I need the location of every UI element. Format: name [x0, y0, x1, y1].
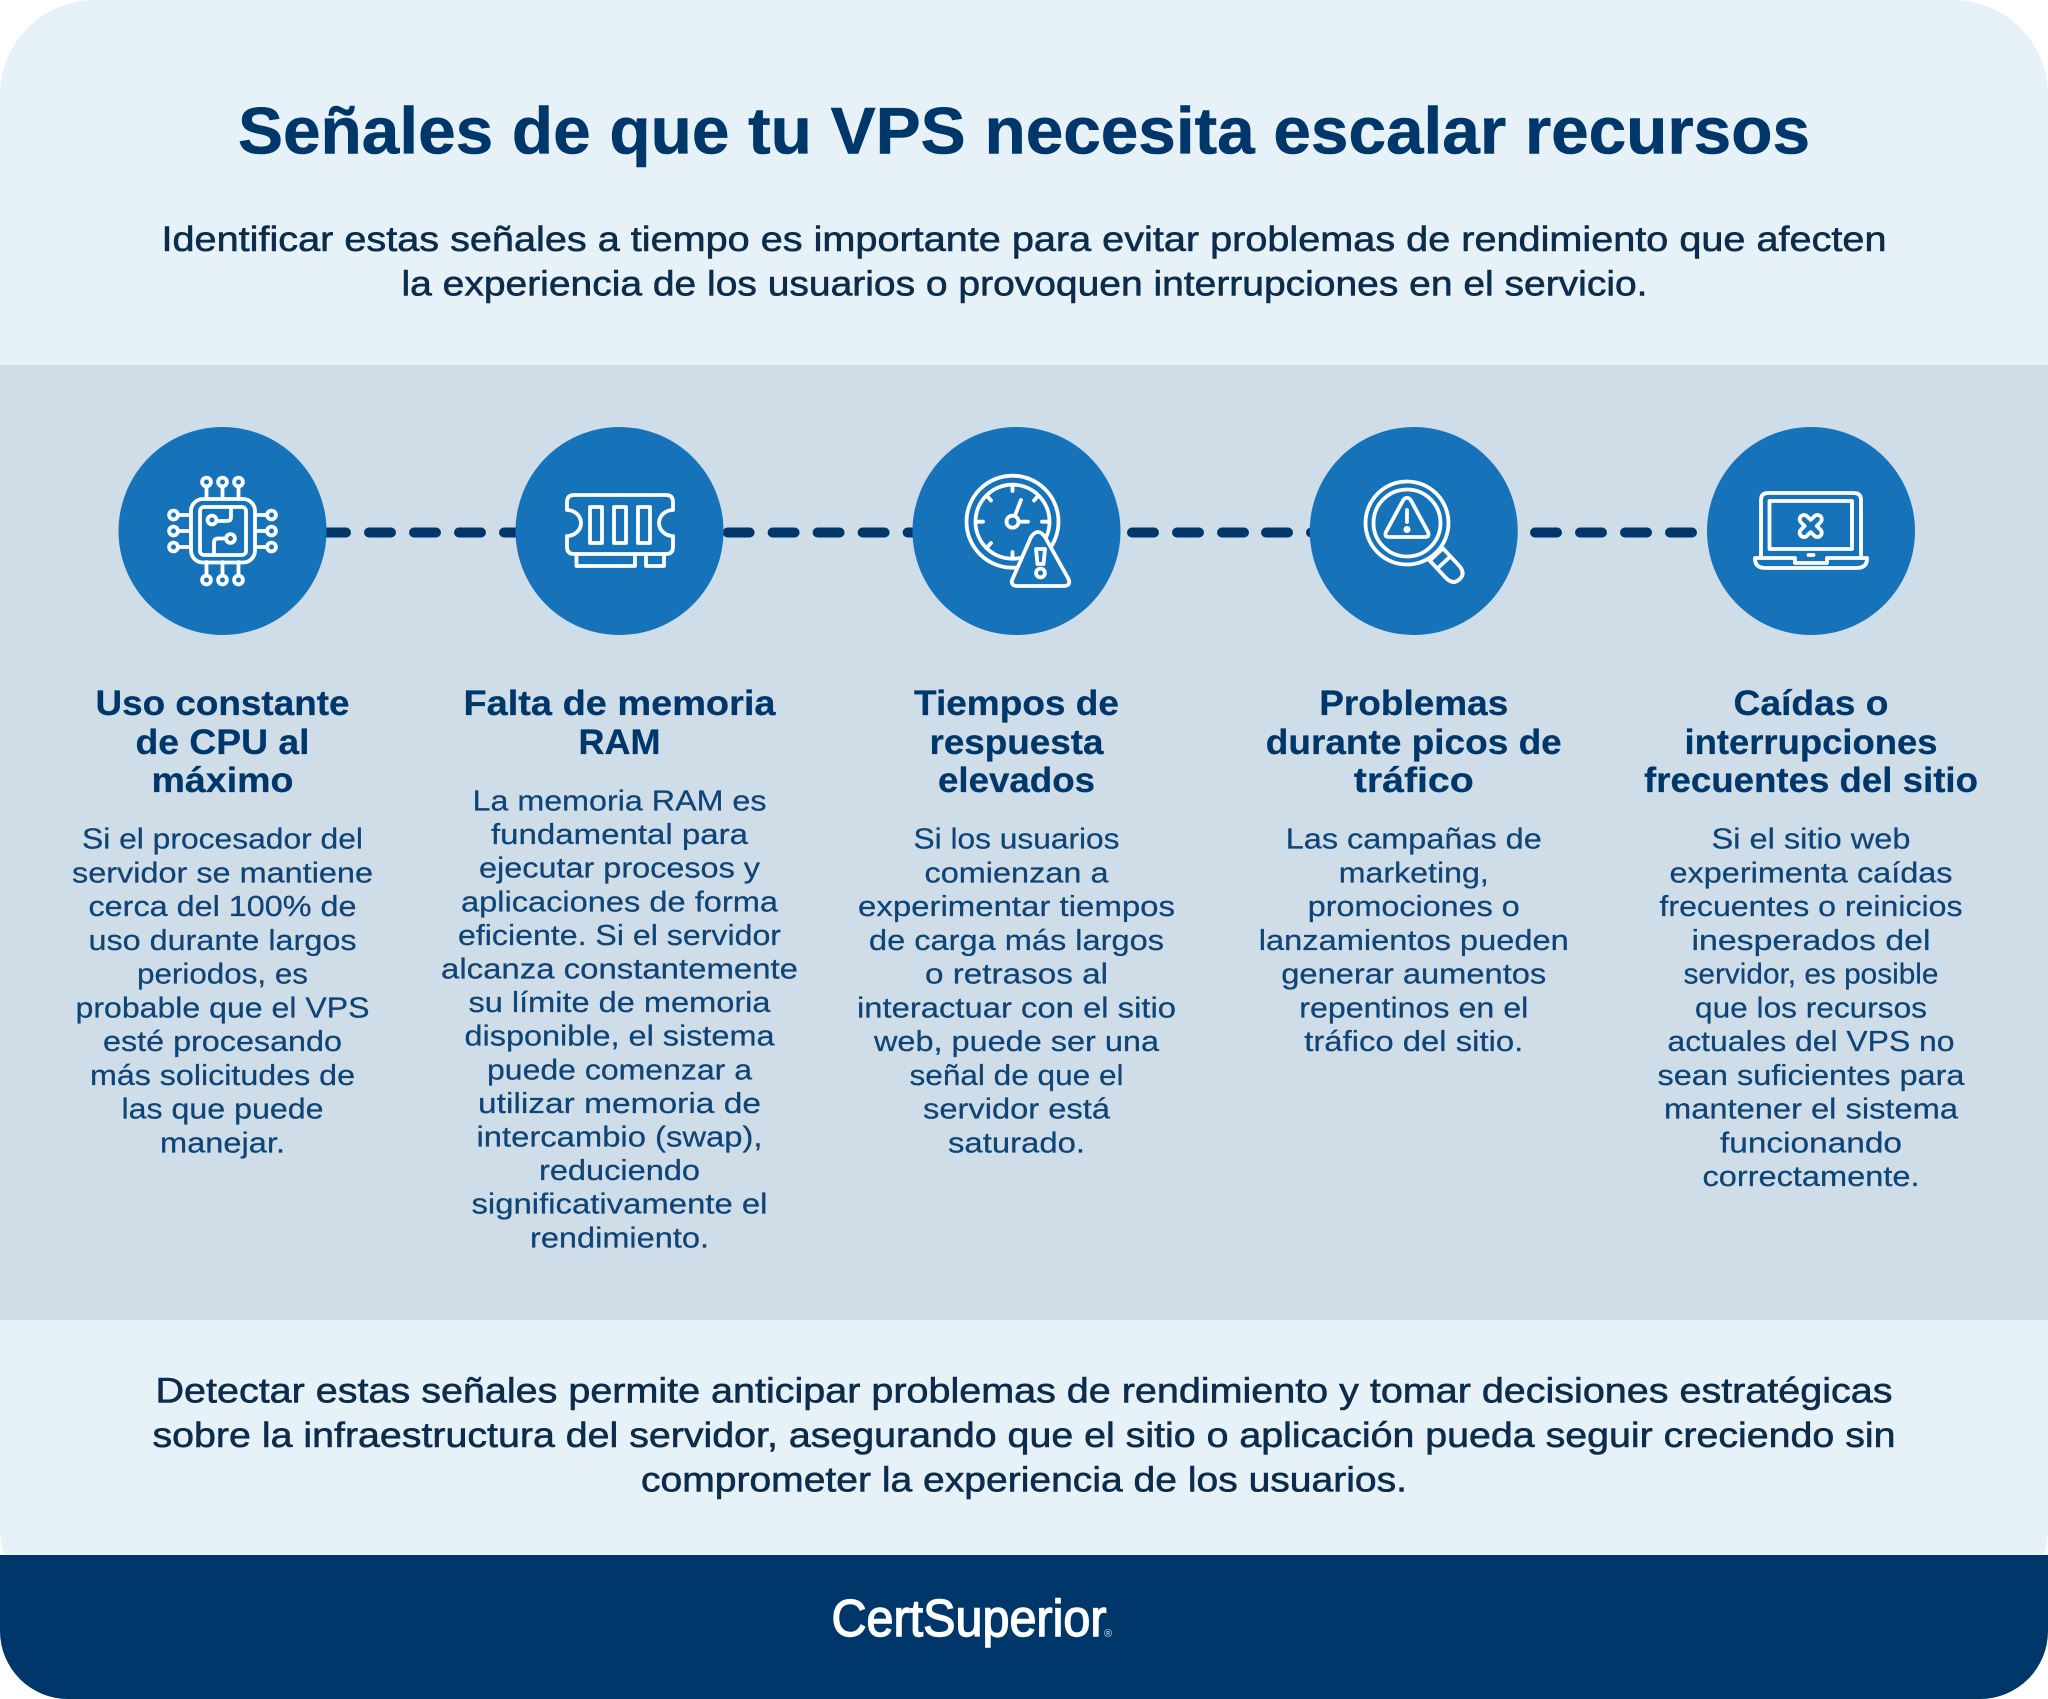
closing text: Detectar estas señales permite anticipar problemas de rendimiento y tomar decisiones estratégicas	[156, 1372, 1892, 1410]
icon: laptop with error mark	[1707, 427, 1915, 635]
heading: response time: elevados	[938, 761, 1095, 800]
panel: RAM signal	[441, 684, 798, 1254]
text block: outages: que los recursos	[1695, 992, 1927, 1024]
text block: RAM: puede comenzar a	[487, 1054, 753, 1086]
intro text: la experiencia de los usuarios o provoquen interrupciones en el servicio.	[402, 264, 1648, 304]
text block: response time: servidor está	[923, 1094, 1111, 1126]
text block: outages: actuales del VPS no	[1668, 1026, 1954, 1058]
text block: traffic peaks: lanzamientos pueden	[1259, 925, 1569, 957]
icon: clock with warning triangle	[912, 427, 1120, 635]
text block: outages: sean suficientes para	[1658, 1060, 1965, 1092]
heading: outages: Caídas o	[1734, 684, 1888, 723]
heading: outages: interrupciones	[1684, 723, 1938, 762]
text block: response time: comienzan a	[924, 857, 1109, 889]
icon: magnifier with warning	[1310, 427, 1518, 635]
text block: outages: servidor, es posible	[1684, 958, 1938, 990]
text block: RAM: significativamente el	[472, 1189, 768, 1221]
text block: CPU: Si el procesador del	[82, 824, 363, 856]
text block: response time: señal de que el	[910, 1060, 1124, 1092]
text block: RAM	[441, 786, 798, 1254]
text block: traffic peaks: repentinos en el	[1299, 992, 1528, 1024]
text block: traffic peaks: promociones o	[1308, 891, 1520, 923]
text block: RAM: rendimiento.	[530, 1222, 709, 1254]
text block: traffic peaks: generar aumentos	[1281, 958, 1546, 990]
text block: outages: funcionando	[1720, 1127, 1902, 1159]
text block: outages: frecuentes o reinicios	[1660, 891, 1962, 923]
text block: CPU: servidor se mantiene	[72, 857, 373, 889]
closing text	[152, 1372, 1896, 1500]
heading: traffic peaks: Problemas	[1319, 684, 1508, 723]
text block: CPU: más solicitudes de	[90, 1060, 355, 1092]
text block: RAM: disponible, el sistema	[464, 1021, 775, 1053]
text block: CPU: periodos, es	[137, 958, 308, 990]
text block: CPU	[72, 824, 373, 1159]
heading: traffic peaks: tráfico	[1354, 761, 1474, 800]
icon: RAM module	[516, 427, 724, 635]
text block: outages: Si el sitio web	[1712, 824, 1910, 856]
heading: CPU: máximo	[152, 761, 294, 800]
text block: traffic peaks	[1259, 824, 1569, 1058]
closing text: comprometer la experiencia de los usuarios.	[641, 1460, 1407, 1500]
text block: RAM: eficiente. Si el servidor	[458, 920, 781, 952]
logo: CertSuperior: CertSuperior	[832, 1590, 1106, 1648]
text block: RAM: su límite de memoria	[468, 987, 771, 1019]
intro text: Identificar estas señales a tiempo es importante para evitar problemas de rendimiento que afecten	[162, 220, 1886, 259]
heading: CPU: Uso constante	[96, 684, 350, 723]
heading: outages: frecuentes del sitio	[1644, 761, 1978, 800]
heading: RAM	[464, 684, 776, 762]
text block: RAM: intercambio (swap),	[476, 1122, 762, 1154]
text block: RAM: ejecutar procesos y	[479, 853, 761, 885]
text block: response time: Si los usuarios	[914, 824, 1120, 856]
text block: CPU: las que puede	[122, 1094, 324, 1126]
panel: outages signal	[1644, 684, 1978, 1193]
text block: traffic peaks: marketing,	[1339, 857, 1489, 889]
text block: RAM: utilizar memoria de	[478, 1088, 761, 1120]
panel: response time signal	[857, 684, 1176, 1159]
panel: signals band background	[0, 365, 2048, 1320]
panel: traffic peaks signal	[1259, 684, 1569, 1058]
heading: traffic peaks	[1266, 684, 1562, 800]
text block: CPU: probable que el VPS	[76, 992, 370, 1024]
logo: CertSuperior: ®	[1104, 1628, 1112, 1640]
text block: outages: inesperados del	[1692, 925, 1930, 957]
footer bar	[0, 1555, 2048, 1699]
heading: response time: Tiempos de	[914, 684, 1119, 723]
title: Señales de que tu VPS necesita escalar recursos	[238, 94, 1810, 168]
text block: response time: web, puede ser una	[873, 1026, 1160, 1058]
heading: RAM: RAM	[578, 723, 660, 762]
heading: traffic peaks: durante picos de	[1266, 723, 1562, 762]
text block: traffic peaks: Las campañas de	[1286, 824, 1542, 856]
text block: response time: de carga más largos	[869, 925, 1164, 957]
panel: CPU signal	[72, 684, 373, 1159]
text block: CPU: manejar.	[160, 1127, 285, 1159]
intro text	[162, 220, 1886, 304]
text block: response time: experimentar tiempos	[858, 891, 1175, 923]
text block: response time: o retrasos al	[925, 958, 1108, 990]
heading: CPU	[96, 684, 350, 800]
text block: RAM: fundamental para	[491, 819, 749, 851]
heading: response time: respuesta	[930, 723, 1104, 762]
text block: outages: correctamente.	[1702, 1161, 1920, 1193]
text block: outages: experimenta caídas	[1670, 857, 1952, 889]
text block: response time: interactuar con el sitio	[857, 992, 1176, 1024]
heading: CPU: de CPU al	[136, 723, 310, 762]
text block: outages	[1658, 824, 1965, 1193]
icon: CPU chip	[118, 427, 326, 635]
text block: RAM: La memoria RAM es	[472, 786, 766, 818]
text block: CPU: cerca del 100% de	[88, 891, 356, 923]
text block: outages: mantener el sistema	[1664, 1094, 1959, 1126]
text block: response time	[857, 824, 1176, 1159]
text block: response time: saturado.	[948, 1127, 1085, 1159]
text block: traffic peaks: tráfico del sitio.	[1304, 1026, 1523, 1058]
closing text: sobre la infraestructura del servidor, asegurando que el sitio o aplicación pueda seguir creciendo sin	[152, 1416, 1896, 1455]
dashed connector lines	[319, 528, 1697, 538]
text block: CPU: esté procesando	[103, 1026, 342, 1058]
heading: RAM: Falta de memoria	[464, 684, 776, 723]
text block: RAM: alcanza constantemente	[441, 954, 798, 986]
heading: outages	[1644, 684, 1978, 800]
text block: RAM: reduciendo	[539, 1155, 700, 1187]
heading: response time	[914, 684, 1119, 800]
text block: CPU: uso durante largos	[88, 925, 356, 957]
text block: RAM: aplicaciones de forma	[461, 886, 779, 918]
